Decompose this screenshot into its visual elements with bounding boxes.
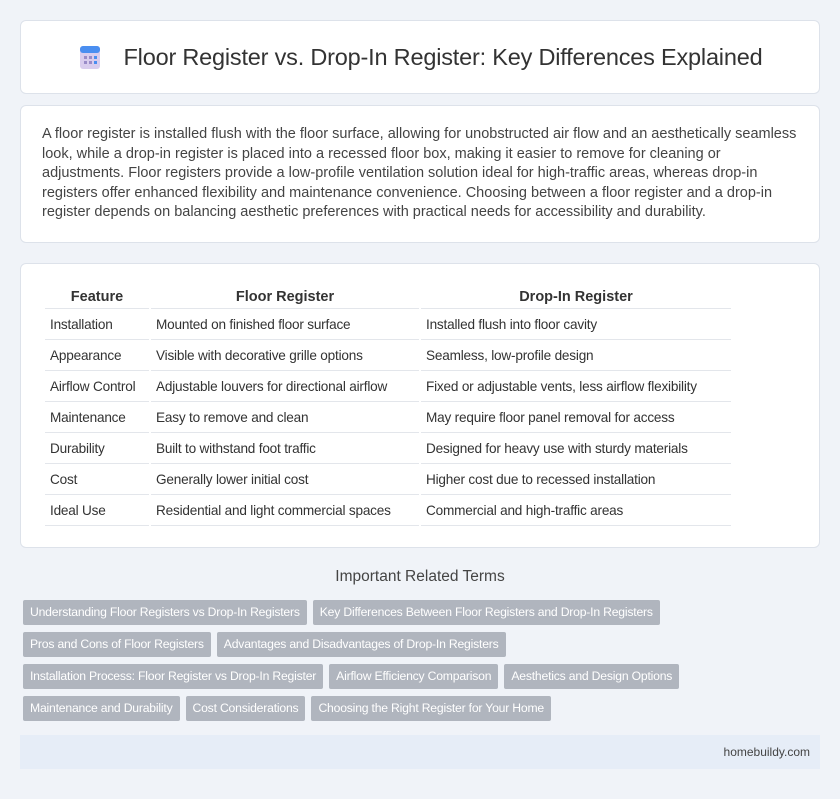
- comparison table: Drop-In Register: [519, 289, 633, 305]
- title: Floor Register vs. Drop-In Register: Key Differences Explained: [124, 44, 762, 70]
- related term tags: Maintenance and Durability: [30, 701, 172, 715]
- comparison table: [20, 263, 820, 548]
- intro text: [20, 105, 820, 243]
- related terms heading: Important Related Terms: [335, 568, 505, 585]
- comparison table: Feature: [71, 289, 123, 305]
- comparison table: Commercial and high-traffic areas: [426, 502, 623, 518]
- related term tags: [23, 600, 679, 721]
- header card: [20, 20, 820, 94]
- comparison table: May require floor panel removal for access: [426, 410, 674, 424]
- related term tags: Pros and Cons of Floor Registers: [30, 637, 204, 651]
- comparison table: Cost: [50, 472, 77, 486]
- related term tags: Aesthetics and Design Options: [511, 669, 672, 683]
- comparison table: Higher cost due to recessed installation: [426, 472, 655, 486]
- comparison table: Residential and light commercial spaces: [156, 502, 391, 518]
- comparison table: Airflow Control: [50, 378, 135, 394]
- comparison table: Easy to remove and clean: [156, 410, 308, 424]
- comparison table: Appearance: [50, 348, 121, 362]
- comparison table: Generally lower initial cost: [156, 472, 308, 486]
- comparison table: Ideal Use: [50, 502, 106, 518]
- comparison table: Visible with decorative grille options: [156, 348, 363, 362]
- comparison table: Adjustable louvers for directional airflow: [156, 378, 387, 394]
- footer: homebuildy.com: [724, 745, 810, 759]
- comparison table: Installed flush into floor cavity: [426, 316, 597, 332]
- related term tags: Key Differences Between Floor Registers and Drop-In Registers: [320, 605, 653, 619]
- comparison table: Installation: [50, 316, 113, 332]
- related term tags: Installation Process: Floor Register vs Drop-In Register: [30, 669, 316, 683]
- related term tags: Cost Considerations: [192, 701, 298, 715]
- comparison table: Seamless, low-profile design: [426, 348, 593, 362]
- comparison table: Maintenance: [50, 410, 126, 424]
- footer: [20, 735, 820, 769]
- comparison table: Built to withstand foot traffic: [156, 440, 316, 456]
- comparison table: Designed for heavy use with sturdy materials: [426, 440, 688, 456]
- related term tags: Choosing the Right Register for Your Home: [318, 701, 544, 715]
- comparison table: Fixed or adjustable vents, less airflow flexibility: [426, 378, 697, 394]
- intro text: A floor register is installed flush with the floor surface, allowing for unobstructed air flow and an aesthetically seamless look, while a drop-in register is placed into a recessed floor box, making it easier to remove for cleaning or adjustments. Floor registers provide a low-profile ventilation solution ideal for high-traffic areas, whereas drop-in registers offer enhanced flexibility and maintenance convenience. Choosing between a floor register and a drop-in register depends on balancing aesthetic preferences with practical needs for accessibility and durability.: [42, 126, 796, 220]
- related term tags: Advantages and Disadvantages of Drop-In Registers: [224, 637, 499, 651]
- comparison table: Durability: [50, 440, 105, 456]
- icon: calendar: [80, 46, 100, 69]
- comparison table: Floor Register: [236, 289, 334, 305]
- related term tags: Understanding Floor Registers vs Drop-In Registers: [30, 605, 300, 619]
- comparison table: Mounted on finished floor surface: [156, 316, 350, 332]
- related term tags: Airflow Efficiency Comparison: [336, 669, 491, 683]
